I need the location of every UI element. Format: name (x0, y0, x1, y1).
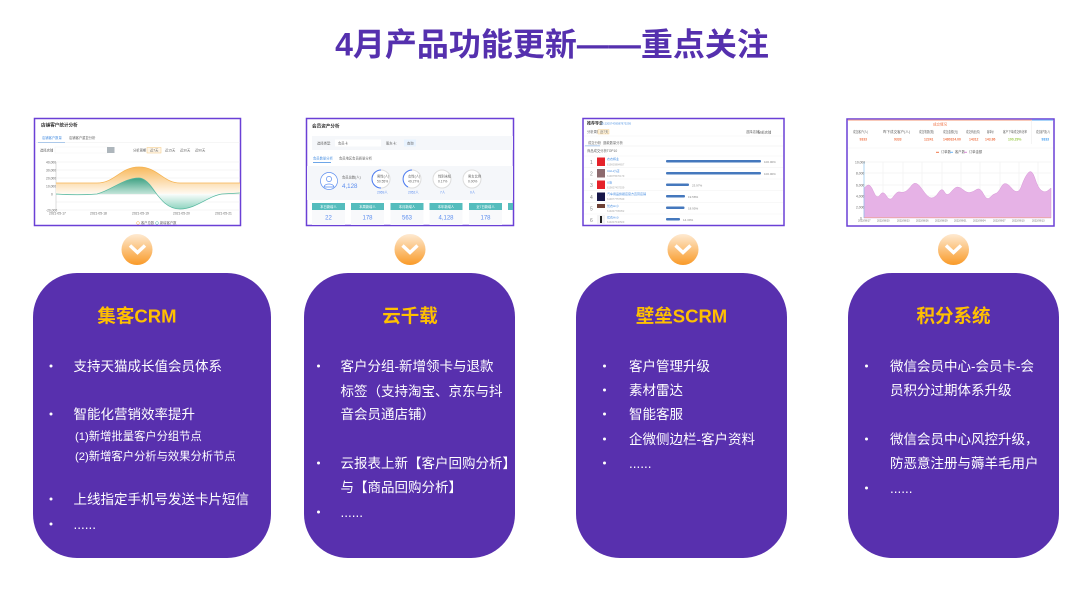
screenshot: points area chart: 0 (860, 216, 862, 220)
screenshot: product ranking list: 19.58% (688, 195, 699, 199)
screenshot: points area chart: 10,000 (855, 160, 865, 164)
screenshot: store customer analysis area chart: 近15天 (165, 148, 176, 152)
text block: 集客CRM features: (1)新增批量客户分组节点 (75, 429, 202, 443)
screenshot: points area chart: 2022/08/23 (897, 220, 910, 222)
icon: down arrow button 4 (938, 234, 969, 265)
screenshot: store customer analysis area chart (34, 118, 240, 226)
text block: 集客CRM features: 智能化营销效率提升 (74, 406, 195, 422)
screenshot: member asset analysis: 查询 (407, 140, 414, 146)
screenshot: store customer analysis area chart: -20,000 (46, 208, 57, 212)
panel: 集客CRM (33, 273, 271, 558)
screenshot: member asset analysis: 0.17% (438, 180, 447, 184)
screenshot: product ranking list: 100.00% (764, 160, 776, 164)
screenshot: points area chart: 客户下单成交转化率 (1003, 129, 1028, 134)
text block: 云千载 features: 云报表上新【客户回购分析】 (340, 455, 516, 471)
screenshot: product ranking list: 6 (590, 218, 593, 224)
screenshot: member asset analysis: 178 (480, 216, 491, 222)
screenshot: points area chart (847, 119, 1054, 226)
screenshot: points area chart: 昨下成交客户(人) (883, 129, 910, 134)
screenshot: product ranking list: CHH小店 (607, 168, 620, 173)
screenshot: store customer analysis area chart: 2021-05-19 (132, 212, 149, 216)
text block: 积分系统 features (865, 359, 1038, 496)
text block: 积分系统 features: 员积分过期体系升级 (890, 383, 1012, 398)
screenshot: member asset analysis: 178 (362, 216, 373, 222)
text block: 云千载 features: 与【商品回购分析】 (340, 480, 462, 495)
screenshot: product ranking list: 619075570179 (607, 174, 625, 178)
icon: down arrow button 3 (668, 234, 698, 265)
screenshot: store customer analysis area chart: 近90天 (195, 148, 206, 152)
icon: down arrow button 2 (394, 234, 426, 265)
screenshot: member asset analysis: 会员数量分析 (313, 156, 333, 160)
screenshot: product ranking list: 选择店铺 (746, 129, 760, 134)
screenshot: member asset analysis: 本日新增人 (320, 204, 337, 209)
screenshot: points area chart: 客户数 (955, 149, 966, 154)
screenshot: product ranking list: 近7天 (600, 129, 609, 134)
screenshot: points area chart: 2022/09/13 (1032, 220, 1045, 222)
screenshot: points area chart: 12241 (924, 138, 934, 142)
heading: 积分系统: 积分系统 (916, 306, 991, 326)
screenshot: member asset analysis: 女性(人) (408, 174, 420, 178)
screenshot: store customer analysis area chart: 2021-05-20 (173, 212, 190, 216)
screenshot: points area chart: 成交客户数(人) (1036, 129, 1050, 134)
screenshot: product ranking list: 14.39% (683, 218, 694, 222)
screenshot: points area chart: 2022/08/20 (877, 220, 890, 222)
screenshot: points area chart: 1480324.00 (943, 138, 961, 142)
screenshot: points area chart: 4,000 (856, 194, 864, 198)
screenshot: points area chart: 9333 (860, 138, 867, 142)
screenshot: store customer analysis area chart: 10,000 (46, 184, 56, 188)
screenshot: member asset analysis: 22 (325, 216, 332, 222)
text block: 壁垒SCRM features (603, 358, 755, 471)
screenshot: member asset analysis: 本月新增人 (399, 204, 416, 209)
screenshot: member asset analysis: 会员资产分析 (312, 122, 340, 130)
screenshot: points area chart: 2022/09/04 (973, 220, 986, 222)
screenshot: store customer analysis area chart: 店铺客户统计分析 (41, 122, 78, 128)
screenshot: member asset analysis: 选择类型: (317, 140, 331, 146)
screenshot: member asset analysis: 563 (402, 216, 413, 222)
screenshot: member asset analysis: 7人 (440, 190, 446, 194)
screenshot: product ranking list: 23.97% (692, 184, 703, 188)
screenshot: member asset analysis: 50.55% (377, 180, 388, 184)
screenshot: product ranking list: 2 (590, 172, 593, 178)
screenshot: points area chart: 2,000 (856, 206, 864, 210)
screenshot: product ranking list: ID:22057439587875295 (601, 122, 631, 126)
screenshot: product ranking list: 619077757539 (607, 197, 625, 201)
screenshot: points area chart: 成交金额(元) (943, 129, 958, 134)
heading: 集客CRM: 集客CRM (97, 306, 177, 326)
screenshot: points area chart: 8,000 (856, 172, 864, 176)
screenshot: points area chart: 143.86 (985, 138, 995, 142)
screenshot: store customer analysis area chart: 新增客户数 (160, 220, 177, 225)
text block: 云千载 features: 标签（支持淘宝、京东与抖 (340, 383, 503, 399)
panel: 积分系统 (848, 273, 1059, 558)
screenshot: store customer analysis area chart: 30,000 (46, 168, 56, 172)
text block: 集客CRM features (50, 359, 249, 532)
screenshot: product ranking list: 619207795052 (607, 209, 625, 213)
screenshot: points area chart: 9333 (894, 138, 902, 142)
screenshot: member asset analysis: 会员卡 (338, 140, 349, 146)
text block: 壁垒SCRM features: 素材雷达 (629, 383, 683, 398)
screenshot: member asset analysis: 股东卡: (386, 140, 397, 146)
screenshot: store customer analysis area chart: 店铺客户数量 (42, 135, 62, 140)
screenshot: points area chart: 成交笔数(笔) (919, 129, 934, 134)
text block: 积分系统 features: 微信会员中心-会员卡-会 (890, 359, 1034, 374)
screenshot: member asset analysis (306, 118, 514, 226)
screenshot: points area chart: 2022/08/26 (916, 220, 929, 222)
screenshot: store customer analysis area chart: 40,000 (46, 160, 56, 164)
text block: 壁垒SCRM features: ...... (629, 456, 652, 471)
screenshot: points area chart: 2022/09/10 (1012, 220, 1025, 222)
screenshot: points area chart: 2022/09/07 (993, 220, 1006, 222)
screenshot: member asset analysis: 本周新增人 (359, 204, 376, 209)
screenshot: product ranking list: 全部店铺 (758, 130, 772, 134)
screenshot: product ranking list: 100.00% (764, 172, 776, 176)
text block: 积分系统 features: 防恶意注册与薅羊毛用户 (890, 455, 1038, 471)
screenshot: points area chart: 2022/08/29 (935, 220, 948, 222)
screenshot: points area chart: 客单价 (987, 129, 994, 134)
screenshot: points area chart: 成交客户(人) (853, 129, 868, 134)
panel: 壁垒SCRM (576, 273, 787, 558)
screenshot: product ranking list: 18.95% (688, 206, 699, 210)
screenshot: product ranking list: 1 (590, 160, 593, 166)
screenshot: product ranking list: 退款数量分析 (603, 140, 623, 145)
text block: 集客CRM features: 上线指定手机号发送卡片短信 (74, 492, 249, 507)
panel: 云千载 (304, 273, 516, 558)
screenshot: product ranking list: 3 (590, 183, 593, 189)
text block: 积分系统 features: ...... (890, 481, 913, 496)
screenshot: points area chart: 成交商品(件) (966, 129, 980, 134)
screenshot: store customer analysis area chart: 店铺客户重复分析 (69, 135, 96, 140)
screenshot: product ranking list: 分析周期 (587, 129, 601, 134)
text block: 云千载 features (317, 358, 516, 520)
screenshot: member asset analysis: 本年新增人 (438, 204, 455, 209)
screenshot: product ranking list: 汽车用品旗舰店官方直营店铺 (607, 191, 646, 196)
screenshot: member asset analysis: 0人 (470, 190, 476, 194)
screenshot: product ranking list: U店 (607, 180, 612, 184)
screenshot: points area chart: 2022/09/01 (954, 220, 967, 222)
screenshot: store customer analysis area chart: 2021-05-18 (90, 212, 107, 216)
screenshot: product ranking list: 优衣Hi小 (607, 203, 619, 208)
screenshot: member asset analysis: 会员总数(人) (342, 174, 361, 180)
screenshot: store customer analysis area chart: 选择店铺 (40, 148, 54, 152)
text block: 积分系统 features: 微信会员中心风控升级， (890, 432, 1038, 447)
screenshot: product ranking list: 推荐导单 (587, 120, 603, 126)
screenshot: member asset analysis: 会员地区会员质量分析 (339, 156, 373, 160)
screenshot: product ranking list: 成交分析 (588, 140, 602, 145)
text block: 集客CRM features: (2)新增客户分析与效果分析节点 (75, 449, 236, 463)
title: 4月产品功能更新——重点关注 (335, 26, 769, 62)
screenshot: member asset analysis: 性别未知 (438, 174, 451, 178)
screenshot: member asset analysis: 49.27% (408, 180, 419, 184)
screenshot: product ranking list: 619207640509 (607, 220, 625, 224)
screenshot: store customer analysis area chart: 20,000 (46, 176, 56, 180)
screenshot: member asset analysis: 近7日新增人 (476, 204, 495, 209)
screenshot: product ranking list: 619005884657 (607, 162, 625, 166)
screenshot: store customer analysis area chart: 近30天 (180, 148, 191, 152)
screenshot: points area chart: 6,000 (856, 184, 864, 188)
text block: 云千载 features: 音会员通店铺） (340, 406, 435, 422)
screenshot: product ranking list: 衣衣裤业 (607, 156, 619, 161)
screenshot: member asset analysis: 4,128 (342, 183, 358, 190)
text block: 集客CRM features: 支持天猫成长值会员体系 (74, 359, 222, 374)
screenshot: store customer analysis area chart: 0 (51, 192, 53, 196)
screenshot: product ranking list: 619007457539 (607, 186, 625, 190)
screenshot: points area chart: 14312 (969, 138, 979, 142)
screenshot: points area chart: 2022/08/17 (858, 220, 871, 222)
text block: 云千载 features: ...... (340, 505, 363, 520)
screenshot: product ranking list: 5 (590, 206, 593, 212)
screenshot: member asset analysis: 2069人 (377, 190, 388, 194)
text block: 壁垒SCRM features: 企微侧边栏-客户资料 (629, 431, 755, 447)
screenshot: store customer analysis area chart: 客户总数 (141, 220, 155, 225)
heading: 壁垒SCRM: 壁垒SCRM (636, 306, 727, 326)
screenshot: points area chart: 9333 (1042, 138, 1049, 142)
text block: 壁垒SCRM features: 客户管理升级 (629, 358, 710, 374)
icon: down arrow button 1 (122, 234, 152, 265)
screenshot: product ranking list: 商品成交分析TOP10 (587, 148, 617, 153)
screenshot: points area chart: 订单数 (941, 149, 952, 154)
screenshot: store customer analysis area chart: 2021-05-17 (49, 212, 66, 216)
text block: 集客CRM features: ...... (74, 517, 96, 532)
screenshot: product ranking list (583, 118, 784, 226)
screenshot: member asset analysis: 0.00% (468, 180, 477, 184)
screenshot: product ranking list: 4 (590, 195, 593, 201)
screenshot: store customer analysis area chart: 分析周期 (133, 148, 147, 152)
screenshot: member asset analysis: 4,128 (438, 216, 454, 222)
text block: 云千载 features: 客户分组-新增领卡与退款 (340, 358, 494, 374)
screenshot: member asset analysis: 男女比例 (468, 174, 482, 178)
text block: 壁垒SCRM features: 智能客服 (629, 406, 683, 422)
screenshot: member asset analysis: 2052人 (408, 190, 419, 194)
screenshot: product ranking list: 优衣Hi小 (607, 214, 619, 220)
screenshot: points area chart: 100.29% (1008, 138, 1021, 142)
screenshot: points area chart: 订单金额 (969, 149, 983, 154)
screenshot: store customer analysis area chart: 2021-05-21 (215, 212, 232, 216)
heading: 云千载: 云千载 (382, 306, 438, 326)
screenshot: member asset analysis: 男性(人) (377, 174, 389, 178)
screenshot: points area chart: 成交情况 (933, 122, 947, 126)
screenshot: store customer analysis area chart: 近7天 (150, 148, 159, 152)
